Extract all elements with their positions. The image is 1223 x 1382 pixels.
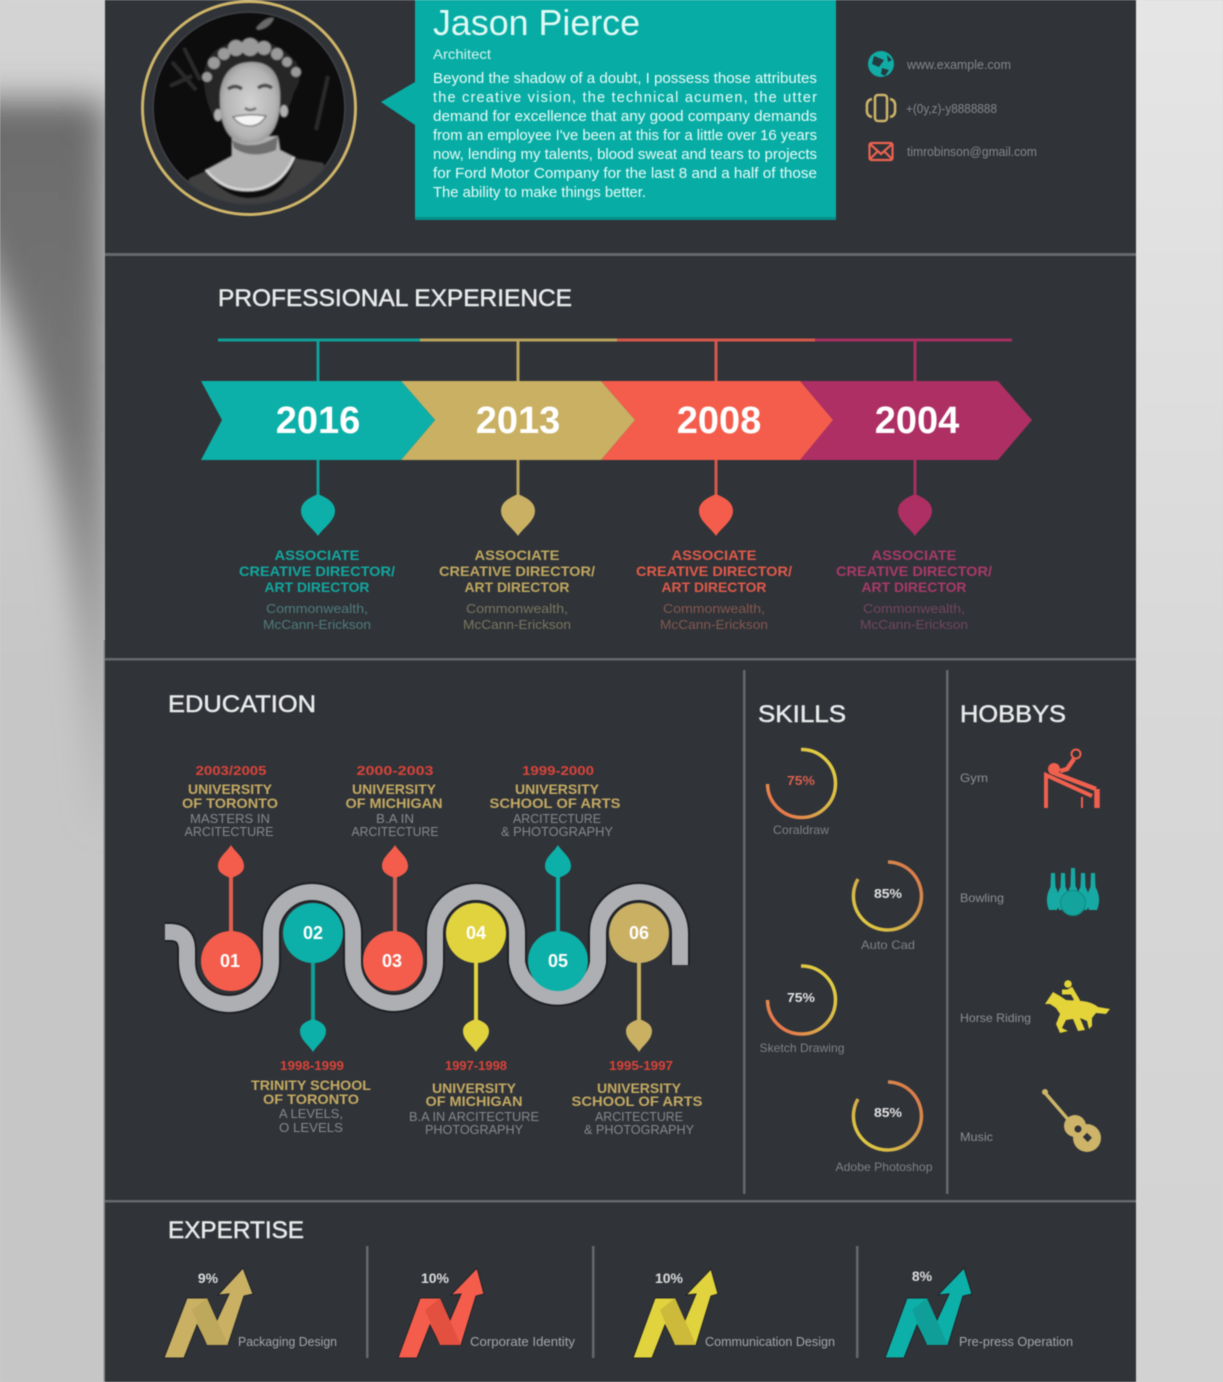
panel: hobbies — [960, 701, 1110, 1152]
job 2013: CREATIVE DIRECTOR/ — [439, 563, 595, 579]
education entry 05: ARCITECTURE — [513, 812, 601, 826]
numbered circles: 01 — [220, 951, 240, 971]
education entry 06: 1995-1997 — [609, 1058, 673, 1073]
year ribbon: 2013 — [476, 400, 560, 442]
biography text: the creative vision, the technical acumen, the utter — [433, 90, 817, 106]
job 2013: McCann-Erickson — [463, 617, 571, 632]
biography text: The ability to make things better. — [433, 185, 646, 201]
education entry 03: B.A IN — [376, 812, 414, 826]
skill ring: Coraldraw: 75% — [787, 773, 815, 788]
skill ring: Coraldraw — [768, 749, 835, 837]
education entry 04: PHOTOGRAPHY — [425, 1123, 524, 1137]
education entry 02 — [251, 1058, 371, 1135]
job 2016: McCann-Erickson — [263, 617, 371, 632]
job 2016: CREATIVE DIRECTOR/ — [239, 563, 395, 579]
education entry 06: SCHOOL OF ARTS — [572, 1093, 702, 1109]
education entry 06: & PHOTOGRAPHY — [584, 1123, 695, 1137]
job 2008: McCann-Erickson — [660, 617, 768, 632]
face — [220, 62, 280, 144]
education entry 02: OF TORONTO — [263, 1091, 359, 1107]
education entry 01: OF TORONTO — [182, 795, 278, 811]
skill ring: Sketch Drawing — [760, 966, 844, 1055]
biography text: now, lending my talents, blood sweat and tears to projects — [433, 147, 817, 163]
biography text: Beyond the shadow of a doubt, I possess those attributes — [433, 71, 817, 87]
job 2004: ASSOCIATE — [872, 547, 956, 563]
education entry 05: UNIVERSITY — [515, 781, 600, 797]
chest — [206, 136, 294, 190]
education entry 06 — [572, 1058, 702, 1137]
email: timrobinson@gmail.com — [907, 144, 1037, 159]
heading: HOBBYS — [960, 701, 1066, 728]
contact list — [867, 51, 1037, 160]
job 2004: CREATIVE DIRECTOR/ — [836, 563, 992, 579]
skill ring: Adobe Photoshop: Adobe Photoshop — [836, 1160, 933, 1174]
numbered circles: 06 — [629, 923, 649, 943]
job title: Architect — [433, 46, 491, 62]
education entry 03 — [346, 763, 442, 839]
expertise: communication design: Communication Design — [705, 1334, 835, 1349]
icon: horse rider — [1045, 980, 1110, 1033]
shirt — [188, 158, 325, 204]
panel: professional experience — [201, 285, 1032, 632]
job 2008 — [636, 494, 792, 632]
education entry 01: 2003/2005 — [196, 763, 266, 778]
expertise: packaging design: Packaging Design — [238, 1334, 337, 1349]
education entry 01: ARCITECTURE — [184, 825, 274, 839]
hobby label: horse riding: Horse Riding — [960, 1011, 1031, 1025]
job 2013 — [439, 494, 595, 632]
skill ring: Auto Cad: Auto Cad — [861, 938, 915, 952]
skill ring: Adobe Photoshop: 85% — [874, 1105, 902, 1120]
expertise: packaging design: 9% — [198, 1270, 219, 1286]
education entry 01 — [182, 763, 278, 839]
heading: PROFESSIONAL EXPERIENCE — [218, 285, 572, 312]
education entry 05: 1999-2000 — [522, 763, 594, 778]
education entry 02: TRINITY SCHOOL — [251, 1077, 371, 1093]
education entry 02: A LEVELS, — [279, 1107, 343, 1121]
bio card — [381, 0, 836, 220]
biography text: demand for excellence that any good company demands — [433, 109, 817, 125]
education entry 04: OF MICHIGAN — [426, 1093, 522, 1109]
ears — [214, 109, 222, 121]
year ribbon — [201, 381, 1032, 460]
job 2016: Commonwealth, — [266, 601, 368, 616]
icon: globe — [868, 51, 894, 77]
heading: SKILLS — [758, 701, 846, 728]
skill ring: Adobe Photoshop — [836, 1082, 933, 1174]
year ribbon: 2004 — [875, 400, 959, 442]
biography text: from an employee I've been at this for a little over 16 years — [433, 128, 817, 144]
expertise: pre-press operation: 8% — [912, 1268, 933, 1284]
skill ring: Auto Cad — [853, 862, 921, 952]
job 2008: ASSOCIATE — [672, 547, 756, 563]
skill ring: Coraldraw: Coraldraw — [773, 823, 829, 837]
job 2008: ART DIRECTOR — [662, 579, 766, 595]
numbered circles: 04 — [466, 923, 486, 943]
education entry 05: & PHOTOGRAPHY — [501, 825, 614, 839]
job 2016: ART DIRECTOR — [264, 579, 370, 595]
skill ring: Sketch Drawing: 75% — [787, 990, 815, 1005]
expertise: corporate identity — [398, 1268, 575, 1358]
expertise: communication design — [633, 1269, 835, 1358]
stems and markers — [231, 875, 639, 1025]
education entry 01: UNIVERSITY — [188, 781, 273, 797]
expertise: pre-press operation: Pre-press Operation — [959, 1334, 1073, 1349]
year ribbon: 2008 — [677, 400, 761, 442]
education entry 03: UNIVERSITY — [352, 781, 437, 797]
numbered circles — [201, 903, 669, 991]
education entry 06: UNIVERSITY — [597, 1080, 682, 1096]
expertise: pre-press operation — [885, 1268, 1073, 1358]
icon: gym — [1046, 750, 1097, 808]
biography text: for Ford Motor Company for the last 8 and a half of those — [433, 166, 817, 182]
panel: profile header — [142, 0, 1037, 220]
heading: EDUCATION — [168, 691, 316, 718]
job 2016: ASSOCIATE — [274, 547, 360, 563]
education entry 04: B.A IN ARCITECTURE — [409, 1110, 539, 1124]
timeline rail — [218, 340, 1012, 495]
job 2004 — [836, 494, 992, 632]
panel: skills — [758, 701, 933, 1174]
education entry 03: ARCITECTURE — [352, 825, 438, 839]
job 2013: ART DIRECTOR — [464, 579, 570, 595]
panel: expertise — [164, 1217, 1073, 1358]
hair — [204, 40, 300, 118]
heading: EXPERTISE — [168, 1217, 304, 1244]
hobby label: music: Music — [960, 1130, 993, 1144]
education entry 02: O LEVELS — [279, 1121, 343, 1135]
phone number: +(0y,z)-y8888888 — [906, 101, 997, 116]
biography text — [433, 71, 817, 201]
year ribbon: 2016 — [276, 400, 360, 442]
photo portrait — [142, 2, 356, 215]
panel: education — [165, 691, 702, 1137]
icon: guitar — [1042, 1089, 1101, 1152]
job 2013: ASSOCIATE — [474, 547, 560, 563]
skill ring: Sketch Drawing: Sketch Drawing — [760, 1041, 844, 1055]
job 2004: McCann-Erickson — [860, 617, 968, 632]
winding road chart — [165, 845, 680, 1052]
job 2016 — [239, 494, 395, 632]
section dividers — [105, 253, 1136, 1358]
education entry 06: ARCITECTURE — [595, 1110, 683, 1124]
education entry 03: 2000-2003 — [356, 763, 434, 778]
education entry 02: 1998-1999 — [280, 1058, 344, 1073]
education entry 04 — [409, 1058, 539, 1137]
icon: mail — [870, 143, 892, 160]
numbered circles: 03 — [382, 951, 402, 971]
job 2004: ART DIRECTOR — [862, 579, 966, 595]
education entry 05 — [490, 763, 620, 839]
hobby label: bowling: Bowling — [960, 891, 1004, 905]
numbered circles: 05 — [548, 951, 568, 971]
name: Jason Pierce — [433, 2, 640, 43]
education entry 03: OF MICHIGAN — [346, 795, 442, 811]
skill ring: Auto Cad: 85% — [874, 886, 902, 901]
education entry 05: SCHOOL OF ARTS — [490, 795, 620, 811]
expertise: communication design: 10% — [655, 1270, 684, 1286]
job 2008: Commonwealth, — [663, 601, 765, 616]
icon: bowling pins — [1047, 868, 1099, 916]
expertise: corporate identity: Corporate Identity — [470, 1334, 575, 1349]
job 2008: CREATIVE DIRECTOR/ — [636, 563, 792, 579]
icon: phone — [867, 95, 895, 121]
education entry 04: UNIVERSITY — [432, 1080, 517, 1096]
education entry 04: 1997-1998 — [445, 1058, 507, 1073]
education entry 01: MASTERS IN — [190, 812, 270, 826]
hobby label: gym: Gym — [960, 771, 988, 785]
job 2004: Commonwealth, — [863, 601, 965, 616]
expertise: packaging design — [164, 1268, 337, 1358]
numbered circles: 02 — [303, 923, 323, 943]
website: www.example.com — [906, 57, 1011, 72]
eyes nose smile — [228, 86, 272, 89]
expertise: corporate identity: 10% — [421, 1270, 450, 1286]
job 2013: Commonwealth, — [466, 601, 568, 616]
